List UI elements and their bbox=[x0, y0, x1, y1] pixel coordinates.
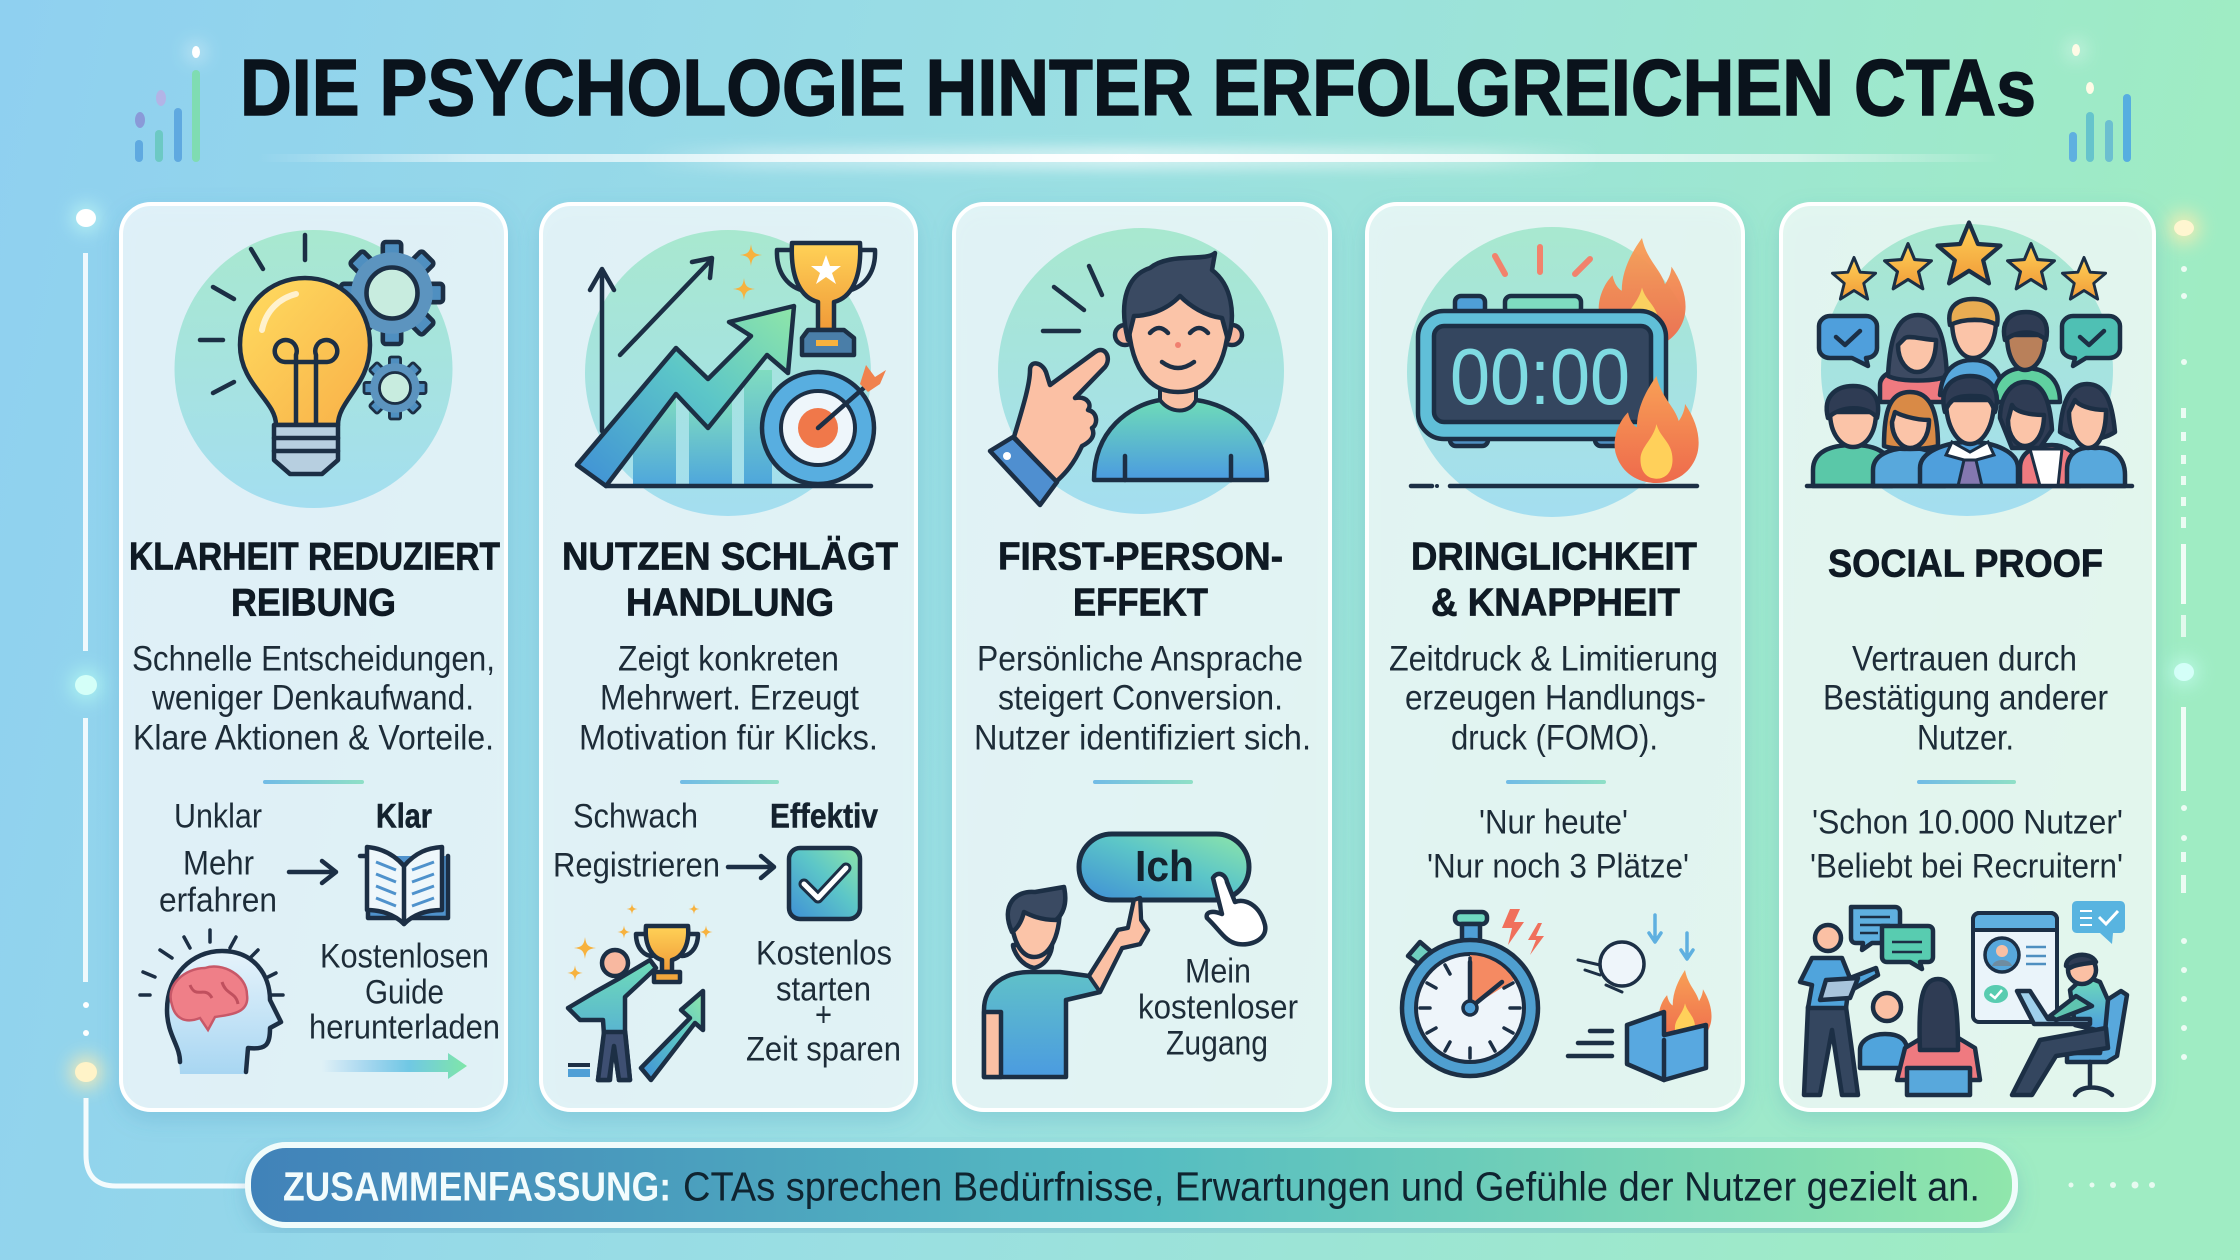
icon: person with trophy bbox=[567, 904, 713, 1080]
heading bbox=[129, 536, 500, 624]
icon: falling ball and burning box bbox=[1568, 915, 1712, 1080]
description bbox=[1389, 640, 1718, 758]
description bbox=[974, 640, 1311, 758]
heading bbox=[562, 536, 898, 624]
heading: KLARHEIT REDUZIERT bbox=[129, 536, 500, 578]
description: druck (FOMO). bbox=[1451, 718, 1658, 758]
description bbox=[1823, 640, 2108, 758]
heading: HANDLUNG bbox=[626, 582, 834, 624]
comparison text: herunterladen bbox=[309, 1008, 500, 1046]
examples bbox=[1810, 804, 2123, 886]
right rail bbox=[2168, 212, 2200, 1060]
heading: EFFEKT bbox=[1073, 582, 1208, 624]
panel: First-Person-Effekt bbox=[954, 204, 1330, 1110]
examples: 'Nur heute' bbox=[1479, 804, 1628, 842]
description: Motivation für Klicks. bbox=[579, 718, 878, 758]
icon: stopwatch bbox=[1402, 909, 1544, 1076]
icon: person pointing at self bbox=[990, 228, 1284, 514]
comparison text: Kostenlosen bbox=[320, 938, 489, 976]
caption: Zugang bbox=[1166, 1024, 1268, 1062]
comparison text: Klar bbox=[376, 798, 432, 836]
left rail bbox=[70, 204, 250, 1186]
description: Persönliche Ansprache bbox=[977, 640, 1303, 678]
icon: click cursor bbox=[1207, 874, 1265, 944]
panel: Social Proof bbox=[1781, 204, 2154, 1110]
comparison text: + bbox=[815, 996, 832, 1034]
comparison text: Unklar bbox=[174, 798, 262, 836]
heading: & KNAPPHEIT bbox=[1431, 582, 1680, 624]
comparison text: Schwach bbox=[573, 798, 698, 836]
caption: Mein bbox=[1185, 952, 1251, 990]
panel: Dringlichkeit und Knappheit bbox=[1367, 204, 1743, 1110]
icon: light bulb with gears bbox=[174, 230, 452, 508]
icon: left bars bbox=[135, 43, 205, 162]
comparison text bbox=[553, 798, 901, 1068]
arrow bbox=[728, 856, 774, 878]
icon: crowd with stars bbox=[1807, 222, 2132, 516]
caption: kostenloser bbox=[1138, 988, 1298, 1026]
summary banner bbox=[248, 1145, 2015, 1225]
comparison text: starten bbox=[776, 970, 871, 1008]
decorative dots bottom right bbox=[2068, 1182, 2155, 1188]
description: Klare Aktionen & Vorteile. bbox=[133, 718, 494, 758]
heading bbox=[1411, 536, 1697, 624]
description: Bestätigung anderer bbox=[1823, 678, 2108, 718]
comparison text bbox=[159, 798, 500, 1046]
arrow: gradient bbox=[322, 1053, 467, 1079]
description: Nutzer identifiziert sich. bbox=[974, 718, 1311, 758]
icon: open book bbox=[360, 847, 448, 924]
heading bbox=[998, 536, 1283, 624]
icon: growth chart with trophy and target bbox=[577, 230, 886, 516]
description: weniger Denkaufwand. bbox=[151, 678, 474, 718]
description: Vertrauen durch bbox=[1852, 640, 2077, 678]
caption bbox=[1138, 952, 1298, 1062]
comparison text: Kostenlos bbox=[756, 934, 892, 972]
comparison text: Registrieren bbox=[553, 846, 720, 884]
arrow bbox=[289, 861, 336, 883]
summary banner: ZUSAMMENFASSUNG: bbox=[283, 1164, 671, 1210]
heading: FIRST-PERSON- bbox=[998, 536, 1283, 578]
description: Schnelle Entscheidungen, bbox=[132, 640, 495, 678]
description: Zeigt konkreten bbox=[618, 640, 839, 678]
examples bbox=[1427, 804, 1689, 886]
icon: right bars bbox=[2067, 41, 2131, 162]
comparison text: erfahren bbox=[159, 882, 277, 920]
examples: 'Schon 10.000 Nutzer' bbox=[1812, 804, 2123, 842]
icon: alarm clock with flames: 00:00 bbox=[1450, 332, 1630, 421]
heading: DRINGLICHKEIT bbox=[1411, 536, 1697, 578]
heading: REIBUNG bbox=[231, 582, 396, 624]
button: Ich bbox=[1079, 834, 1249, 900]
heading: SOCIAL PROOF bbox=[1828, 542, 2103, 586]
comparison text: Mehr bbox=[183, 844, 254, 882]
description bbox=[579, 640, 878, 758]
panel: Klarheit reduziert Reibung bbox=[121, 204, 506, 1110]
icon: alarm clock with flames bbox=[1407, 227, 1699, 517]
examples: 'Nur noch 3 Plätze' bbox=[1427, 848, 1689, 886]
heading: NUTZEN SCHLÄGT bbox=[562, 536, 898, 578]
comparison text: Guide bbox=[365, 974, 444, 1012]
button: Ich: Ich bbox=[1135, 842, 1194, 891]
description bbox=[132, 640, 495, 758]
comparison text: Zeit sparen bbox=[746, 1030, 901, 1068]
description: steigert Conversion. bbox=[998, 678, 1283, 718]
icon: checkbox bbox=[789, 848, 860, 919]
description: erzeugen Handlungs- bbox=[1405, 678, 1706, 718]
comparison text: Effektiv bbox=[770, 798, 878, 836]
icon: head with brain bbox=[140, 930, 283, 1074]
summary banner: CTAs sprechen Bedürfnisse, Erwartungen und Gefühle der Nutzer gezielt an. bbox=[683, 1164, 1980, 1210]
panel: Nutzen schlägt Handlung bbox=[541, 204, 916, 1110]
title: DIE PSYCHOLOGIE HINTER ERFOLGREICHEN CTAs bbox=[240, 43, 2036, 132]
description: Zeitdruck & Limitierung bbox=[1389, 640, 1718, 678]
description: Mehrwert. Erzeugt bbox=[600, 678, 859, 718]
icon: presenter and audience bbox=[1800, 901, 2127, 1095]
title underline bbox=[257, 146, 2002, 170]
examples: 'Beliebt bei Recruitern' bbox=[1810, 848, 2123, 886]
description: Nutzer. bbox=[1917, 718, 2014, 758]
icon: person pointing at button bbox=[984, 887, 1148, 1077]
